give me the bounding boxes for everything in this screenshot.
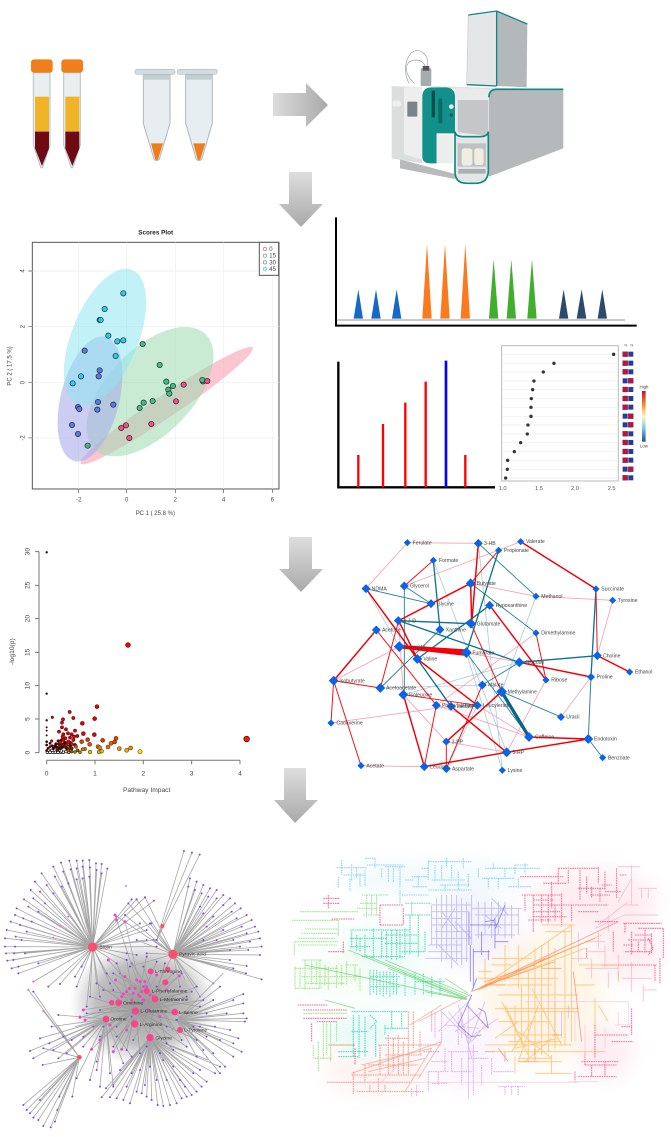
teal edges xyxy=(366,543,603,758)
hub labels: Glycine xyxy=(155,1035,172,1041)
pathway module: lower right magenta xyxy=(575,1008,633,1082)
orange peaks xyxy=(422,244,470,319)
spokes: lower-left hub fan xyxy=(23,990,79,1127)
axis labels: 15 xyxy=(25,648,32,656)
node labels: Ribose xyxy=(551,678,567,684)
heat legend: % xyxy=(630,344,634,348)
x axis labels: 2 xyxy=(174,498,178,504)
node labels: Formate xyxy=(439,558,458,564)
node labels: Succinate xyxy=(601,587,624,593)
axis labels: 10 xyxy=(25,682,32,689)
node labels: Tyrosine xyxy=(618,598,638,604)
pathway module: pink upper right xyxy=(572,865,658,1002)
chart: ranked bar chart xyxy=(338,361,495,487)
node labels: Glucose xyxy=(525,660,544,666)
strong teal edges xyxy=(399,550,597,706)
axis labels: 0 xyxy=(25,750,32,754)
icon: blood collection tube 2 xyxy=(61,59,83,168)
thick red edge xyxy=(399,645,466,656)
node labels: Acetone xyxy=(382,628,401,634)
chart: pathway impact scatter xyxy=(9,548,249,794)
red points xyxy=(50,705,99,747)
node labels: Acetoacetate xyxy=(386,686,416,692)
pathway module: lower left teal xyxy=(338,1012,408,1058)
network: metabolite correlations xyxy=(328,539,652,774)
axis labels: 25 xyxy=(25,581,32,589)
pathway module: teal upper xyxy=(350,915,432,960)
confidence ellipses xyxy=(46,257,259,479)
hub labels xyxy=(99,945,207,1041)
node labels: Proline xyxy=(597,675,613,681)
node labels: Valerate xyxy=(526,539,545,545)
axis labels: -log10(p) xyxy=(9,638,16,665)
axis labels xyxy=(9,548,242,794)
node labels: Ethanol xyxy=(635,670,652,676)
node labels: Benzoate xyxy=(608,755,630,761)
node labels: Hypoxanthine xyxy=(496,603,527,609)
light teal edges xyxy=(366,543,536,770)
node labels: 3-HB xyxy=(484,541,496,547)
pale module underlay xyxy=(297,862,662,1095)
x axis labels: 4 xyxy=(222,498,226,504)
hub labels: Ornithine xyxy=(123,1000,143,1006)
legend: 45 xyxy=(269,267,277,273)
hub labels: Pyruvic acid xyxy=(179,952,206,958)
spokes: core links xyxy=(80,915,179,1052)
heading: Scores Plot: Scores Plot xyxy=(138,230,174,237)
navy peaks xyxy=(559,289,607,319)
green peaks xyxy=(489,259,537,319)
score points xyxy=(69,291,210,448)
x axis labels xyxy=(28,271,275,517)
central metabolite nodes xyxy=(103,967,183,1041)
node labels: Butyrate xyxy=(477,581,496,587)
legend: 0 xyxy=(269,247,273,253)
pathway module: saturated orange rays xyxy=(478,938,595,1062)
pathway module: pale lower right xyxy=(327,1002,632,1082)
hub labels: L-Phenylalanine xyxy=(152,989,188,995)
axis labels: 1 xyxy=(93,771,97,778)
axis labels: 4 xyxy=(238,771,242,778)
node labels: Aspartate xyxy=(452,766,474,772)
arrow: analysis to pathway xyxy=(279,537,323,592)
pathway module: light-blue-violet center xyxy=(425,895,522,968)
hub labels: L-Methionine xyxy=(160,997,189,1003)
heat legend: High xyxy=(640,384,649,389)
thick teal edge xyxy=(502,692,529,737)
node labels: Lactate xyxy=(457,704,474,710)
hub nodes xyxy=(77,924,178,1060)
spokes: second hub fan xyxy=(115,878,262,997)
strong red edges xyxy=(334,542,630,767)
plot frame and grid xyxy=(32,242,279,489)
node labels: Phenylalanine xyxy=(442,703,475,709)
node labels: Dimethylamine xyxy=(541,631,576,637)
pathway module: salmon bottom xyxy=(327,1012,442,1095)
spokes: inner links from glutamine xyxy=(87,957,207,1053)
pathway module: magenta right xyxy=(587,922,663,983)
axis labels: 0 xyxy=(45,771,49,778)
hub labels: L-Serine xyxy=(179,1010,198,1016)
heat legend: % xyxy=(624,344,628,348)
orange and yellow points xyxy=(67,736,142,754)
spokes: left hub fan xyxy=(30,1015,132,1087)
spokes: inner links from methionine xyxy=(100,963,200,1047)
node labels: Xanthine xyxy=(446,627,466,633)
hub labels: Orotine xyxy=(110,1017,127,1023)
node labels: Valine xyxy=(423,657,437,663)
x axis labels: -2 xyxy=(76,498,82,504)
y axis labels: 2 xyxy=(21,324,27,328)
y axis labels: 4 xyxy=(21,269,27,273)
pathway module: light green left xyxy=(295,960,362,992)
x axis labels: 1.0 xyxy=(499,486,507,492)
pathway module: light blue top xyxy=(337,858,540,915)
heatmap blue cells xyxy=(623,352,633,480)
legend xyxy=(259,242,279,275)
pathway module: salmon rays xyxy=(352,995,470,1092)
node labels: Glycerol xyxy=(410,584,429,590)
dark points xyxy=(45,551,72,752)
icon: blood collection tube 1 xyxy=(31,59,53,168)
spokes: lower hub fan xyxy=(102,1038,220,1106)
node labels: Caffeine xyxy=(535,735,554,741)
chart: PCA scores plot xyxy=(7,230,279,517)
pathway module: red left accents xyxy=(323,895,403,953)
axis labels: Pathway Impact xyxy=(123,787,170,794)
central dense cloud xyxy=(70,940,217,1067)
node labels: NDMA xyxy=(372,586,387,592)
axis labels: 5 xyxy=(25,717,32,721)
network: metabolite-gene hub graph xyxy=(5,851,262,1127)
light pink edges xyxy=(331,542,613,767)
arrow: pathway to integration xyxy=(274,768,318,823)
blue peaks xyxy=(354,289,401,319)
x axis labels: 2.0 xyxy=(571,486,579,492)
brown points xyxy=(56,741,77,751)
node labels: Malate xyxy=(488,683,504,689)
x axis labels: 0 xyxy=(125,498,129,504)
node labels: Pyruvate xyxy=(405,644,425,650)
hub labels: Biotin xyxy=(99,945,112,951)
node labels: Lysine xyxy=(508,768,522,774)
hub labels: L-Arginine xyxy=(140,1022,163,1028)
node labels: Glycine xyxy=(437,601,454,607)
legend: 30 xyxy=(269,260,277,266)
axes xyxy=(35,552,240,764)
node labels: Isobutyrate xyxy=(339,678,365,684)
y axis labels: PC 2 ( 17.5 %) xyxy=(7,346,13,386)
red edges xyxy=(331,550,597,769)
node labels: Glutamate xyxy=(477,621,501,627)
dots xyxy=(504,353,615,480)
icon: microtube 1 xyxy=(135,69,175,160)
white baseline points xyxy=(46,749,70,754)
pathway module: red top right xyxy=(520,867,627,932)
node labels: Uracil xyxy=(566,715,579,721)
pathway module: strong blue center xyxy=(469,905,508,992)
node labels: Methylamine xyxy=(508,689,537,695)
x axis labels xyxy=(499,486,616,492)
x axis labels: PC 1 ( 25.8 %) xyxy=(136,511,175,517)
arrow: instrument to data analysis xyxy=(279,172,323,227)
chart: VIP score dot plot xyxy=(499,344,649,492)
pathway module: green upper left xyxy=(292,895,388,955)
node labels xyxy=(336,539,652,774)
highlight points xyxy=(126,643,249,742)
hub labels: L-Glutamine xyxy=(140,1009,168,1015)
axis labels: 2 xyxy=(141,771,145,778)
x axis labels: 2.5 xyxy=(608,486,616,492)
legend: 15 xyxy=(269,254,277,260)
node labels: 3-J-D xyxy=(403,618,416,624)
node labels: Ferulate xyxy=(413,540,432,546)
pathway module: lower left red xyxy=(298,1005,355,1065)
hub labels: L-Tyrosine xyxy=(184,1028,207,1034)
heatmap red cells xyxy=(623,352,633,480)
heat legend: Low xyxy=(640,443,649,448)
pathway module: lower left green xyxy=(303,1013,355,1072)
node labels: Fumarate xyxy=(472,650,495,656)
pathway module: teal lower center xyxy=(370,970,445,997)
pathway module: blue-violet lower hub xyxy=(458,995,488,1037)
x axis labels: 1.5 xyxy=(535,486,543,492)
axis labels: 3 xyxy=(190,771,194,778)
node labels: Acetate xyxy=(366,763,384,769)
hub labels: L-Threonine xyxy=(155,969,182,975)
node labels: Leucine xyxy=(430,764,448,770)
spokes: right hub fan xyxy=(177,973,247,1073)
node labels: Methanol xyxy=(541,594,563,600)
spokes: top long links xyxy=(93,851,200,947)
node labels: 3-PP xyxy=(452,739,464,745)
node labels: Endotoxin xyxy=(594,737,617,743)
node labels: Choline xyxy=(603,653,621,659)
network: global metabolic pathway map xyxy=(292,858,663,1098)
y axis labels: 0 xyxy=(21,380,27,384)
y axis labels: -2 xyxy=(21,435,27,441)
nodes xyxy=(328,539,633,773)
node labels: Leucylerate xyxy=(483,703,510,709)
arrow: samples to instrument xyxy=(273,83,328,127)
chart: chromatogram peaks xyxy=(336,217,637,326)
x axis labels: 6 xyxy=(271,498,275,504)
node labels: 5-HP xyxy=(512,750,525,756)
node labels: Cadaverine xyxy=(336,721,363,727)
pathway module: rose diagonal rays xyxy=(473,922,618,1062)
plot frame xyxy=(502,346,618,481)
pathway module: orange xyxy=(472,925,622,1073)
icon: microtube 2 xyxy=(177,69,217,160)
axis labels: 20 xyxy=(25,615,32,622)
spokes: first hub fan xyxy=(5,860,157,1007)
pathway module: converging green rays xyxy=(305,950,468,1008)
small pink spoke dots on left edge xyxy=(27,885,127,1012)
axes xyxy=(336,217,637,326)
axis labels: 30 xyxy=(25,548,32,555)
icon: mass spectrometer instrument xyxy=(392,11,563,183)
y axis labels xyxy=(7,269,27,441)
heat legend xyxy=(624,344,649,448)
node labels: Isoleucine xyxy=(409,692,432,698)
pathway module: purple bottom xyxy=(412,1008,525,1097)
pathway module: light purple lower hub xyxy=(438,998,568,1098)
sample tubes and vials xyxy=(31,59,217,168)
node labels: Propionate xyxy=(504,548,529,554)
